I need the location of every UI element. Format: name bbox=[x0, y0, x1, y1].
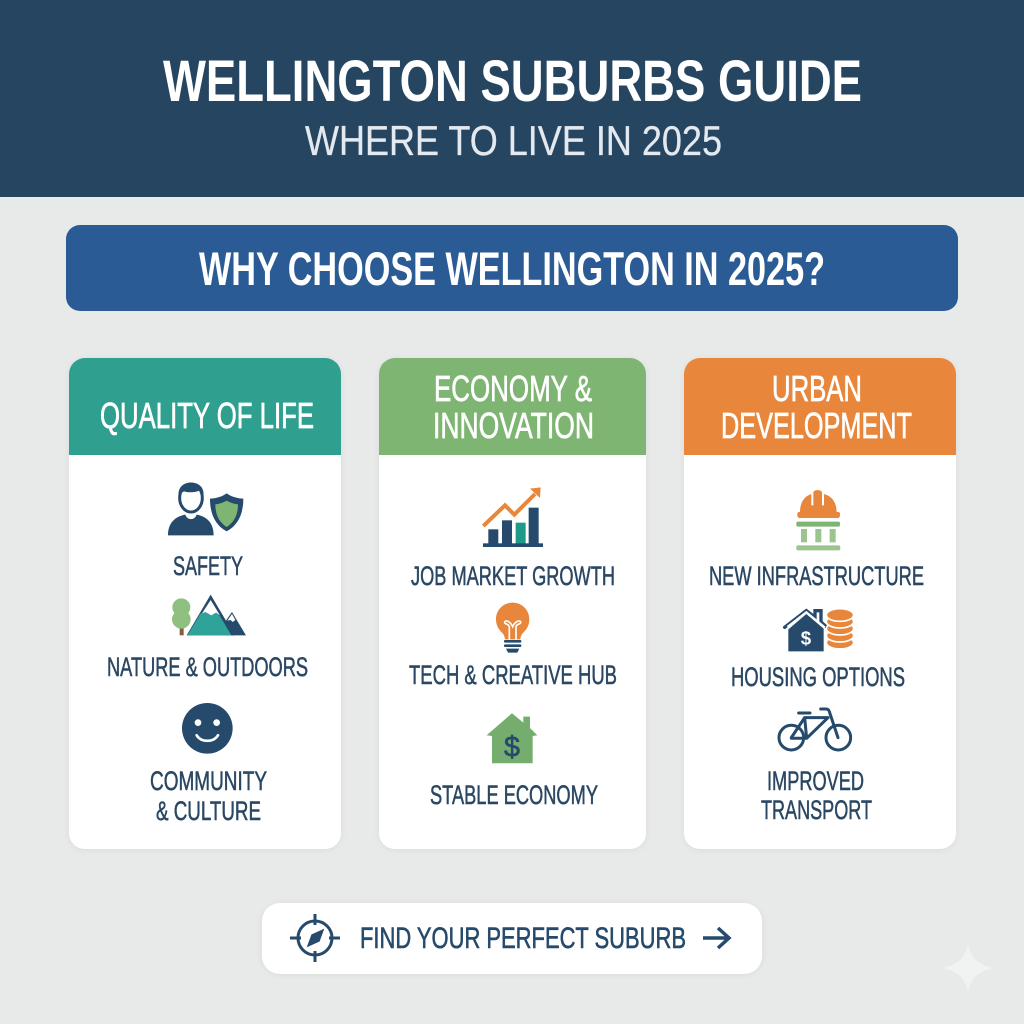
icon: house and coins bbox=[785, 609, 854, 651]
icon: arrow bbox=[703, 928, 729, 948]
label: improved transport bbox=[761, 766, 872, 825]
icon: sparkle bbox=[943, 944, 993, 992]
banner: why choose Wellington bbox=[66, 225, 958, 311]
label: tech and creative hub: TECH & CREATIVE HUB bbox=[409, 660, 617, 690]
label: nature and outdoors: NATURE & OUTDOORS bbox=[107, 652, 308, 682]
panel: urban development bbox=[684, 358, 956, 849]
icon: house with dollar bbox=[487, 713, 537, 764]
icon: person with shield bbox=[168, 483, 243, 535]
heading: economy and innovation bbox=[379, 358, 646, 455]
icon: growth chart bbox=[483, 487, 543, 547]
icon: hard hat and building bbox=[796, 490, 840, 550]
header band bbox=[0, 0, 1024, 197]
heading: quality of life bbox=[69, 358, 341, 455]
icon: light bulb bbox=[496, 603, 529, 653]
heading: urban development bbox=[684, 358, 956, 455]
panel: economy and innovation bbox=[379, 358, 646, 849]
icon: house with dollar: $ bbox=[504, 732, 520, 764]
heading: urban development: DEVELOPMENT bbox=[721, 405, 912, 446]
subtitle: WHERE TO LIVE IN 2025 bbox=[305, 117, 722, 164]
label: community and culture: COMMUNITY bbox=[150, 766, 267, 796]
label: safety: SAFETY bbox=[173, 551, 243, 581]
icon: smiley face bbox=[182, 703, 233, 754]
label: new infrastructure: NEW INFRASTRUCTURE bbox=[709, 561, 924, 591]
icon: compass bbox=[290, 914, 340, 962]
icon: tree and mountains bbox=[172, 595, 246, 635]
icon: bicycle bbox=[779, 709, 851, 750]
label: housing options: HOUSING OPTIONS bbox=[731, 662, 905, 692]
call to action button bbox=[262, 903, 762, 974]
button label: FIND YOUR PERFECT SUBURB bbox=[360, 922, 686, 955]
heading: urban development: URBAN bbox=[772, 368, 862, 409]
heading: economy and innovation: ECONOMY & bbox=[434, 368, 592, 409]
label: community and culture: & CULTURE bbox=[156, 796, 261, 826]
heading: quality of life: QUALITY OF LIFE bbox=[100, 395, 314, 436]
heading: economy and innovation: INNOVATION bbox=[433, 405, 594, 446]
label: community and culture bbox=[150, 766, 267, 826]
panel: quality of life bbox=[69, 358, 341, 849]
label: improved transport: IMPROVED bbox=[767, 766, 864, 796]
label: job market growth: JOB MARKET GROWTH bbox=[411, 561, 615, 591]
icon: house and coins: $ bbox=[801, 628, 812, 649]
label: improved transport: TRANSPORT bbox=[761, 795, 872, 825]
label: stable economy: STABLE ECONOMY bbox=[430, 780, 598, 810]
